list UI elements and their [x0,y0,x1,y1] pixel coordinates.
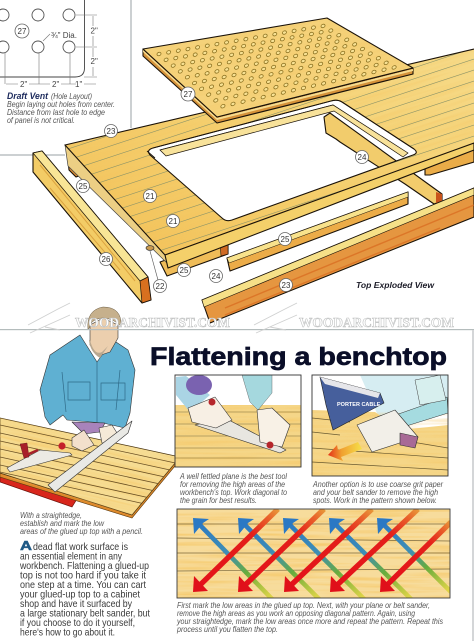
title: Flattening a benchtop [150,343,447,371]
part number labels: 26 [102,255,111,264]
intro body text: here's how to go about it. [20,628,115,638]
wood grain [177,509,450,598]
board outline [65,49,474,255]
dimension labels: 2" [20,80,27,89]
part 23 front rail [202,188,474,323]
draft vent description [7,100,115,125]
intro drop cap: A [20,538,33,553]
pattern caption: your straightedge, mark the low areas once more and repeat the pattern. Repeat this [176,617,443,626]
part 25 left piece under top [68,160,84,177]
head [90,318,118,356]
watermark logos and text: WOODARCHIVIST.COM [299,316,454,331]
sander body [357,410,418,452]
hair [88,307,121,330]
dimension labels: 1" [75,80,82,89]
dowel peg part 22 [146,246,158,280]
wood surface [175,405,301,467]
frame [177,509,450,598]
plane caption: the grain for best results. [180,496,257,505]
draft vent description: Distance from last hole to edge [7,108,105,117]
watermark logos and text: WOODARCHIVIST.COM [75,316,230,331]
table front edge [0,457,180,518]
frame [312,375,448,476]
intro body text: one step at a time. You can cart [20,580,146,591]
woodworker caption: areas of the glued up top with a pencil. [20,527,143,536]
dust bag [320,377,384,430]
dimension labels: 2" [90,26,98,36]
right page edge [472,330,474,641]
part 26 side rail [33,151,151,303]
dimension labels: 2" [52,80,59,89]
pattern caption: process until you flatten the top. [176,625,278,634]
sander caption: spots. Work in the pattern shown below. [313,496,437,505]
intro body text [19,542,150,638]
intro body text: top is not too hard if you take it [20,570,146,582]
part number labels: 25 [79,182,88,191]
board left edge [65,145,168,264]
board top surface [65,49,474,255]
panel: draft vent hole layout [0,0,131,155]
intro body text: a large stationary belt sander, but [20,608,150,620]
part number labels: 27 [184,90,193,99]
wood surface [312,410,448,476]
right hand [257,408,290,447]
sleeves [176,376,210,412]
draft vent title: Draft Vent [7,91,49,101]
dimension labels [20,26,98,89]
draft vent description: Begin laying out holes from center. [7,100,115,109]
board front face [165,143,474,268]
arm [398,396,448,426]
woodworker caption [20,511,143,536]
intro body text: dead flat work surface is [33,542,128,553]
part number labels: 21 [146,192,155,201]
woodworker illustration [0,306,175,518]
intro body text: shop and have it surfaced by [20,599,133,610]
label 27 [15,24,29,38]
intro body text: an essential element in any [20,552,123,562]
hole circles [0,9,75,53]
small rail right [425,149,474,175]
part 25 front piece under top [160,238,228,276]
part number labels: 24 [212,272,221,281]
part number labels: 23 [282,281,291,290]
part number labels: 21 [169,217,178,226]
draft vent frame lines [0,0,131,155]
plane caption: A well fettled plane is the best tool [179,472,287,481]
blue arrow heads [193,518,393,534]
part number labels: 23 [107,127,116,136]
woodworker caption: With a straightedge, [20,511,82,520]
draft vent description: of panel is not critical. [7,116,75,125]
red arrow shafts [198,509,451,587]
vent corner outline [0,0,84,77]
intro body text: if you choose to do it yourself, [20,618,135,629]
direction arrow [328,442,362,461]
panel: hand plane photo [175,375,301,467]
hands [72,430,94,451]
left hand [188,397,232,428]
sander caption: and your belt sander to remove the high [313,488,438,497]
straightedge [48,421,132,492]
dimension labels: 2" [90,57,98,66]
watermark rule [0,329,474,330]
pattern caption: First mark the low areas in the glued up top. Next, with your plane or belt sander, [177,601,430,610]
label 27: 27 [18,27,27,36]
plane caption: for removing the high areas of the [180,480,285,489]
plane caption [179,472,287,505]
draft vent panel [142,18,414,124]
part number labels: 25 [180,266,189,275]
panel: belt sander photo [312,375,448,476]
blue arrow shafts [197,522,451,600]
sander caption: Another option is to use coarse grit paper [312,480,443,489]
table apron [0,476,77,507]
view label: Top Exploded View [356,280,435,290]
part 24 back piece [324,113,442,204]
hand plane [7,442,72,472]
pattern caption [176,601,443,634]
opening rebate [147,100,414,158]
sander motor housing [400,433,418,448]
part number labels: 24 [358,153,367,162]
part number labels [76,87,368,292]
intro body text: workbench. Flattening a glued-up [19,561,149,572]
panel: diagonal pattern diagram [177,509,451,600]
watermark logos and text [28,303,454,333]
pattern caption: remove the high areas as you work an opposing diagonal pattern. Again, using [177,609,415,618]
dimension lines [5,15,97,84]
hand plane body [195,418,286,453]
red arrow heads [193,576,395,592]
frame [175,375,301,467]
exploded view illustration [32,18,474,324]
belt area [72,422,105,434]
plane caption: workbench's top. Work diagonal to [180,488,287,497]
woodworker caption: establish and mark the low [20,519,105,528]
sander caption [312,480,443,505]
dimension labels: ¾" Dia. [51,31,77,40]
part 25 front rail [227,192,408,271]
shirt [40,335,135,428]
benchtop board [64,48,474,269]
draft vent subtitle: (Hole Layout) [51,92,92,101]
bag logo: PORTER CABLE [337,402,381,408]
panel edge [143,49,413,123]
table top [0,418,180,515]
panel top [143,18,413,117]
part number labels: 25 [281,235,290,244]
vent holes [157,24,396,108]
intro body text: your glued-up top to a cabinet [20,590,140,600]
sky wash [360,376,448,416]
part number labels: 22 [156,282,165,291]
board grain [68,52,474,250]
